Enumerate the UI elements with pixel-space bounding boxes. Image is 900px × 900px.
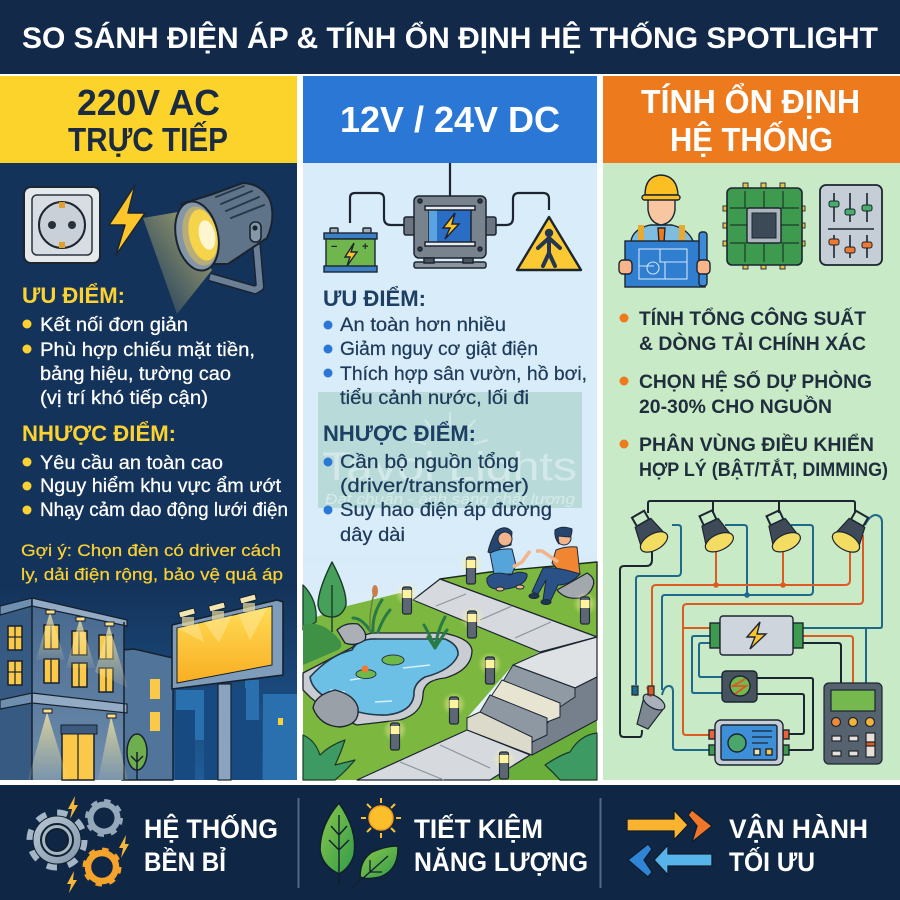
text: advantages 220V	[22, 283, 255, 409]
footer band	[0, 785, 900, 900]
spotlights row	[625, 507, 875, 556]
text: tip: Gợi ý: Chọn đèn có driver cách	[21, 541, 281, 560]
text: disadvantages 220V: NHƯỢC ĐIỂM:	[22, 421, 176, 446]
watermark: Đạt chuẩn - ánh sáng chất lượng	[325, 491, 576, 508]
meter	[722, 671, 757, 702]
heading: system stability: HỆ THỐNG	[670, 120, 833, 158]
grass	[303, 593, 540, 780]
plants	[353, 600, 447, 648]
header band	[0, 0, 900, 74]
skyline	[176, 680, 297, 780]
connector plug	[632, 686, 667, 729]
text: disadvantages 220V: Yêu cầu an toàn cao	[40, 453, 223, 474]
man	[529, 527, 580, 604]
paths and steps	[413, 579, 597, 652]
text: stability checklist: CHỌN HỆ SỐ DỰ PHÒNG	[639, 371, 872, 393]
heading: 220V AC: 220V AC	[77, 82, 220, 123]
panel: 220V AC direct	[0, 76, 297, 780]
watermark	[318, 392, 582, 508]
heading: 220V AC: TRỰC TIẾP	[68, 121, 228, 158]
panel: 12V / 24V DC	[303, 76, 597, 780]
icon: battery: +	[362, 241, 368, 253]
text: disadvantages 220V: Nguy hiểm khu vực ẩm ướt	[40, 476, 282, 497]
pond	[303, 633, 472, 725]
illustration: garden with pond, path and bollard lights	[303, 527, 597, 780]
text: advantages DC: tiểu cảnh nước, lối đi	[340, 388, 529, 409]
illustration: night city with lit building and billboard	[0, 588, 297, 780]
icon: spotlight with beam	[143, 183, 272, 314]
text: disadvantages 220V: Nhạy cảm dao động lưới điện	[40, 500, 288, 521]
calculator panel	[824, 683, 882, 764]
watermark: Tavol Lights	[322, 445, 577, 489]
woman	[487, 528, 530, 591]
icon: warning triangle	[517, 217, 581, 270]
text: disadvantages DC	[323, 421, 552, 546]
diagram: spotlight wiring	[620, 501, 882, 765]
icon: circuit chip	[723, 183, 805, 269]
heading: system stability: TÍNH ỔN ĐỊNH	[641, 83, 860, 120]
text: advantages DC: An toàn hơn nhiều	[340, 315, 506, 336]
billboard	[218, 684, 231, 780]
heading: system stability	[603, 76, 900, 163]
icon: arrows	[627, 810, 712, 877]
text: disadvantages DC: dây dài	[340, 525, 405, 546]
text: advantages 220V: Phù hợp chiếu mặt tiền,	[40, 340, 255, 361]
heading: 12V / 24V DC	[303, 76, 597, 163]
text: advantages DC: Giảm nguy cơ giật điện	[340, 339, 538, 360]
text: disadvantages 220V	[22, 421, 288, 521]
text: stability checklist: 20-30% CHO NGUỒN	[639, 396, 832, 418]
text: advantages 220V: (vị trí khó tiếp cận)	[40, 388, 208, 409]
heading: 220V AC	[0, 76, 297, 163]
text: disadvantages DC: NHƯỢC ĐIỂM:	[323, 421, 476, 446]
bollards	[459, 552, 483, 584]
text: energy saving: TIẾT KIỆM	[414, 813, 543, 844]
windows	[8, 625, 113, 780]
text: energy saving: NĂNG LƯỢNG	[414, 846, 588, 877]
icon: transformer box	[404, 196, 496, 268]
text: disadvantages DC: Suy hao điện áp đường	[340, 500, 552, 521]
side building	[122, 649, 173, 780]
text: advantages 220V: Kết nối đơn giản	[40, 315, 188, 336]
text: disadvantages DC: (driver/transformer)	[340, 476, 529, 497]
text: durable system: HỆ THỐNG	[144, 812, 278, 844]
icon: engineer with blueprint	[619, 175, 710, 287]
text: disadvantages DC: Cần bộ nguồn tổng	[340, 452, 519, 473]
icon: battery	[324, 228, 377, 272]
text: tip: ly, dải điện rộng, bảo vệ quá áp	[21, 565, 283, 584]
icon: wiring from battery to transformer to warning	[350, 163, 549, 225]
text: tip	[21, 541, 283, 584]
main building	[0, 600, 32, 780]
icon: battery: −	[331, 241, 337, 253]
text: advantages DC: Thích hợp sân vườn, hồ bơi,	[340, 364, 587, 385]
title: SO SÁNH ĐIỆN ÁP & TÍNH ỔN ĐỊNH HỆ THỐNG SPOTLIGHT	[22, 21, 878, 55]
text: durable system	[144, 812, 278, 877]
foreground foliage	[303, 735, 355, 780]
text: advantages DC: ƯU ĐIỂM:	[323, 286, 426, 311]
icon: gears	[30, 796, 129, 893]
rocks	[313, 690, 358, 727]
text: energy saving	[414, 813, 588, 877]
panel: system stability	[603, 76, 900, 780]
text: stability checklist: PHÂN VÙNG ĐIỀU KHIỂN	[639, 434, 874, 456]
text: advantages 220V: ƯU ĐIỂM:	[22, 283, 125, 308]
wall lights	[28, 612, 128, 780]
text: advantages 220V: bảng hiệu, tường cao	[40, 364, 231, 385]
text: optimal operation: VẬN HÀNH	[729, 813, 868, 844]
rock seat	[557, 573, 594, 598]
text: stability checklist	[620, 308, 888, 481]
dimmer controller	[709, 720, 789, 765]
icon: lightning bolt	[109, 185, 145, 255]
text: stability checklist: HỢP LÝ (BẬT/TẮT, DIMMING)	[639, 459, 888, 481]
text: stability checklist: TÍNH TỔNG CÔNG SUẤT	[639, 308, 866, 330]
icon: leaves and sun	[320, 798, 401, 888]
tree	[127, 734, 147, 780]
icon: slider control panel	[820, 185, 882, 265]
text: durable system: BỀN BỈ	[144, 845, 226, 877]
icon: wall socket	[24, 187, 100, 263]
power supply	[710, 616, 803, 655]
text: optimal operation	[729, 813, 868, 877]
text: advantages DC	[323, 286, 587, 409]
text: stability checklist: & DÒNG TẢI CHÍNH XÁC	[639, 333, 866, 355]
trees	[303, 585, 316, 630]
heading: 12V / 24V DC: 12V / 24V DC	[340, 99, 560, 140]
text: optimal operation: TỐI ƯU	[729, 845, 815, 877]
